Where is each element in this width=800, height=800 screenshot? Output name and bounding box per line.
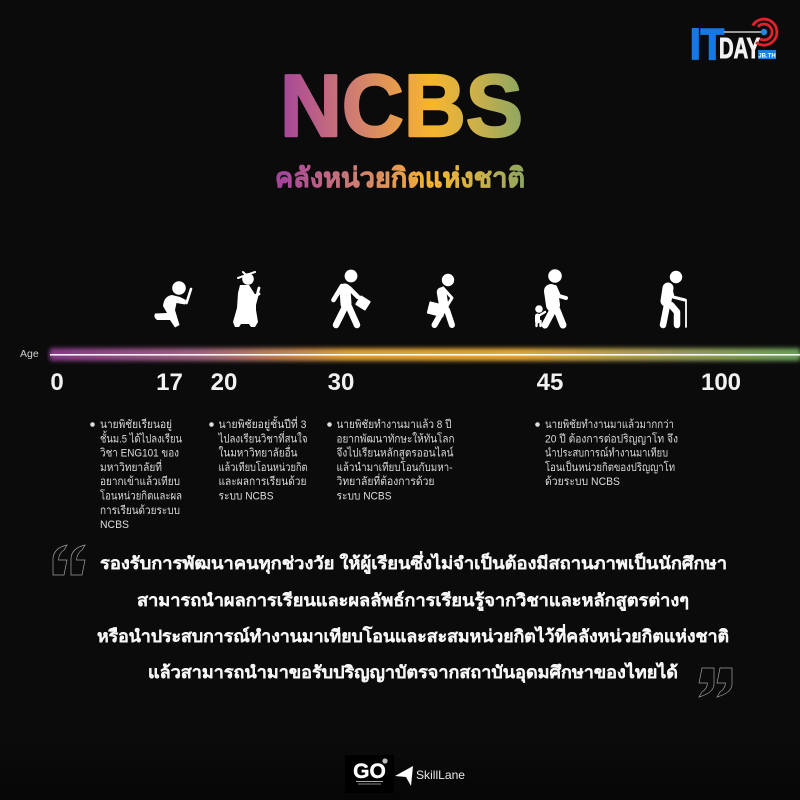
- age numbers: 100: [701, 369, 741, 396]
- quote text: หรือนำประสบการณ์ทำงานมาเทียบโอนและสะสมหน่วยกิตไว้ที่คลังหน่วยกิตแห่งชาติ: [97, 624, 729, 646]
- text block: age 17: การเรียนด้วยระบบ: [100, 504, 180, 517]
- text block: age 17: [90, 418, 182, 531]
- label: Age: Age: [20, 348, 39, 360]
- age numbers: 17: [156, 369, 183, 396]
- subtitle: คลังหน่วยกิตแห่งชาติ: [275, 163, 525, 193]
- icon: graduate in gown: [233, 272, 259, 327]
- text block: age 30: อยากพัฒนาทักษะให้ทันโลก: [336, 431, 454, 445]
- age numbers: 20: [211, 369, 237, 396]
- text block: age 20: ในมหาวิทยาลัยอื่น: [218, 445, 298, 460]
- text block: age 45: ด้วยระบบ NCBS: [545, 475, 620, 488]
- text block: age 17: โอนหน่วยกิตและผล: [100, 488, 182, 502]
- text block: age 17: นายพิชัยเรียนอยู่: [100, 418, 172, 431]
- text block: age 30: ระบบ NCBS: [336, 490, 392, 502]
- age numbers: 30: [328, 369, 354, 396]
- text block: age 30: วิทยาลัยที่ต้องการด้วย: [336, 473, 434, 488]
- title: NCBS: NCBS: [280, 56, 523, 155]
- text block: age 17: วิชา ENG101 ของ: [99, 448, 179, 460]
- icon: kneeling student with book: [154, 281, 191, 328]
- age numbers: 0: [50, 369, 64, 396]
- text block: age 30: จึงไปเรียนหลักสูตรออนไลน์: [336, 446, 454, 460]
- text block: age 45: [535, 418, 678, 488]
- text block: age 17: มหาวิทยาลัยที่: [100, 459, 162, 474]
- logo: GO: GO: [353, 760, 386, 783]
- icon: adult with child: [535, 269, 566, 326]
- logo: IT Day: [690, 19, 777, 69]
- text block: age 20: ระบบ NCBS: [218, 490, 274, 502]
- text block: age 17: อยากเข้าแล้วเทียบ: [100, 475, 180, 488]
- logo: GO: [345, 755, 394, 793]
- quote text: [97, 551, 729, 683]
- quote text: รองรับการพัฒนาคนทุกช่วงวัย ให้ผู้เรียนซึ่งไม่จำเป็นต้องมีสถานภาพเป็นนักศึกษา: [100, 551, 727, 575]
- icon: walking with briefcase: [334, 270, 371, 325]
- text block: age 45: 20 ปี ต้องการต่อปริญญาโท จึง: [545, 431, 678, 445]
- text block: age 17: NCBS: [100, 519, 129, 531]
- text block: age 45: นำประสบการณ์ทำงานมาเทียบ: [545, 446, 668, 460]
- logo: SkillLane: [395, 766, 465, 786]
- text block: age 45: นายพิชัยทำงานมาแล้วมากกว่า: [545, 418, 674, 431]
- icon: walking with shoulder bag: [427, 274, 454, 325]
- logo: IT Day: DAY: [719, 33, 760, 65]
- text block: age 20: แล้วเทียบโอนหน่วยกิต: [218, 460, 308, 474]
- text block: age 45: โอนเป็นหน่วยกิตของปริญญาโท: [545, 459, 675, 474]
- icon: opening quote: [53, 545, 85, 575]
- icon: elderly person with cane: [663, 271, 686, 327]
- age numbers: [50, 369, 741, 396]
- logo: IT Day: JB.TH: [758, 54, 776, 60]
- text block: age 17: ชั้นม.5 ได้ไปลงเรียน: [100, 430, 182, 445]
- text block: age 20: [209, 416, 308, 502]
- text block: age 20: และผลการเรียนด้วย: [218, 475, 306, 488]
- text block: age 30: นายพิชัยทำงานมาแล้ว 8 ปี: [336, 418, 452, 431]
- logo: IT Day: IT: [690, 20, 724, 69]
- timeline axis: [50, 348, 800, 361]
- text block: age 20: ไปลงเรียนวิชาที่สนใจ: [218, 430, 308, 445]
- text block: age 20: นายพิชัยอยู่ชั้นปีที่ 3: [218, 416, 306, 431]
- text block: age 30: [327, 418, 454, 502]
- quote text: สามารถนำผลการเรียนและผลลัพธ์การเรียนรู้จากวิชาและหลักสูตรต่างๆ: [137, 590, 689, 612]
- text block: age 30: แล้วนำมาเทียบโอนกับมหา-: [336, 460, 453, 474]
- logo: SkillLane: SkillLane: [416, 768, 465, 782]
- age numbers: 45: [537, 369, 563, 396]
- icon: closing quote: [699, 668, 732, 697]
- quote text: แล้วสามารถนำมาขอรับปริญญาบัตรจากสถาบันอุดมศึกษาของไทยได้: [148, 662, 678, 683]
